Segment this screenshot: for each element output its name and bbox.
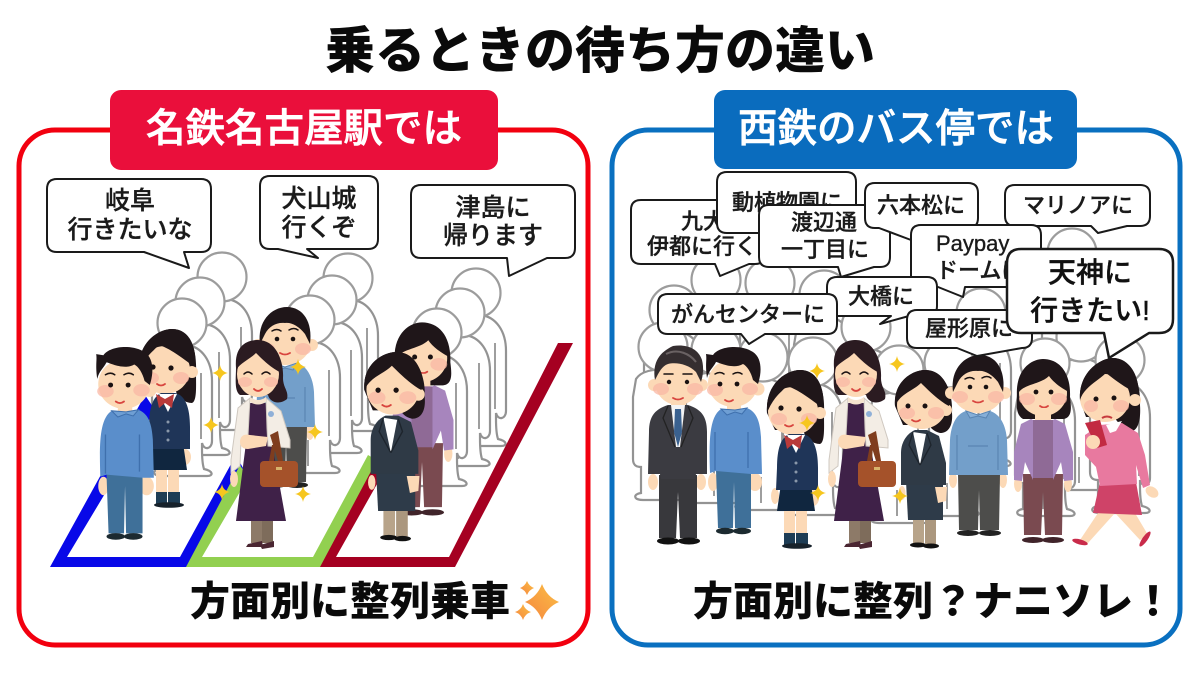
speech bubble: Paypay Dome: ドームに (936, 258, 1023, 283)
sparkles (203, 359, 323, 502)
speech bubble: Gifu: 岐阜 (105, 187, 155, 215)
speech bubble: Tenjin (1007, 249, 1173, 358)
panel: Nishitetsu bus stop (612, 90, 1180, 645)
heading tag: Meitetsu (110, 90, 498, 170)
speech bubble: Kyudai (631, 200, 765, 276)
speech bubble: Tenjin: 天神に (1048, 257, 1132, 288)
waiting queue silhouettes: green line (280, 254, 378, 473)
speech bubble: Ropponmatsu: 六本松に (877, 193, 965, 218)
speech bubble: Kyudai: 九大 (681, 209, 725, 234)
speech bubble: Ohashi: 大橋に (848, 284, 914, 309)
speech bubble: Inuyama (260, 176, 378, 258)
caption: sorted by direction: 方面別に整列乗車 (190, 580, 510, 624)
speech bubble: Gifu (47, 179, 211, 268)
title: 乗るときの待ち方の違い (325, 23, 875, 79)
person: business woman (364, 352, 425, 541)
speech bubble: Tsushima: 帰ります (443, 222, 543, 250)
person: elder lady (230, 340, 298, 549)
speech bubble: Watanabe-dori: 一丁目に (781, 237, 869, 262)
speech bubble: Paypay Dome: Paypay (936, 231, 1009, 256)
person: young man (96, 347, 156, 540)
speech bubble: Tsushima (411, 185, 575, 276)
person: business man (648, 346, 708, 544)
speech bubble: Yakatabaru (907, 310, 1032, 356)
floor lane: green (186, 455, 380, 567)
floor lane: red (320, 343, 573, 567)
heading tag: Nishitetsu: 西鉄のバス停では (738, 107, 1054, 151)
disorganised crowd silhouettes (633, 228, 1150, 523)
speech bubble: Tenjin: 行きたい! (1030, 295, 1150, 326)
speech bubble: Ropponmatsu (865, 183, 978, 240)
person: schoolgirl (767, 370, 826, 549)
panel frame: red (19, 130, 588, 645)
speech bubble: Watanabe-dori: 渡辺通 (791, 210, 857, 235)
speech bubble: Inuyama: 犬山城 (281, 185, 357, 213)
speech bubble: Watanabe-dori (759, 205, 890, 277)
waiting queue silhouettes: red line (407, 268, 506, 486)
icon: sparkles emoji (515, 581, 559, 620)
speech bubble: Inuyama: 行くぞ (281, 214, 357, 242)
speech bubble: Paypay Dome (911, 225, 1041, 297)
speech bubble: Marinoa (1005, 185, 1150, 233)
caption: what sorting?: 方面別に整列？ナニソレ！ (693, 580, 1173, 624)
speech bubble: zoo: 動植物園に (732, 190, 842, 215)
person: elder lady (828, 340, 896, 549)
waiting queue silhouettes: blue line (152, 252, 252, 476)
person: business woman (895, 370, 952, 548)
speech bubble: cancer centre (658, 294, 837, 344)
heading tag: Nishitetsu (714, 90, 1077, 169)
panel: Meitetsu Nagoya Station (19, 90, 588, 645)
speech bubble: Tsushima: 津島に (455, 194, 531, 222)
panel frame: blue (612, 130, 1180, 645)
person: middle-aged man (945, 355, 1011, 536)
speech bubble: cancer centre: がんセンターに (671, 302, 825, 327)
person: middle-aged man (252, 307, 318, 488)
speech bubble: Gifu: 行きたいな (67, 216, 193, 244)
speech bubble: Ohashi (827, 277, 937, 324)
person: woman with phone (1072, 358, 1161, 548)
speech bubble: Kyudai: 伊都に行く (647, 234, 757, 259)
person: schoolgirl (139, 329, 198, 508)
floor lane: blue (50, 395, 243, 567)
speech bubble: zoo (717, 172, 856, 233)
speech bubble: Marinoa: マリノアに (1023, 193, 1133, 218)
speech bubble: Yakatabaru: 屋形原に (925, 316, 1013, 341)
person: young man (706, 347, 764, 534)
person: middle-aged woman (1014, 359, 1073, 543)
heading tag: Meitetsu: 名鉄名古屋駅では (146, 107, 462, 151)
sparkles (799, 356, 908, 504)
person: middle-aged woman (392, 322, 454, 516)
